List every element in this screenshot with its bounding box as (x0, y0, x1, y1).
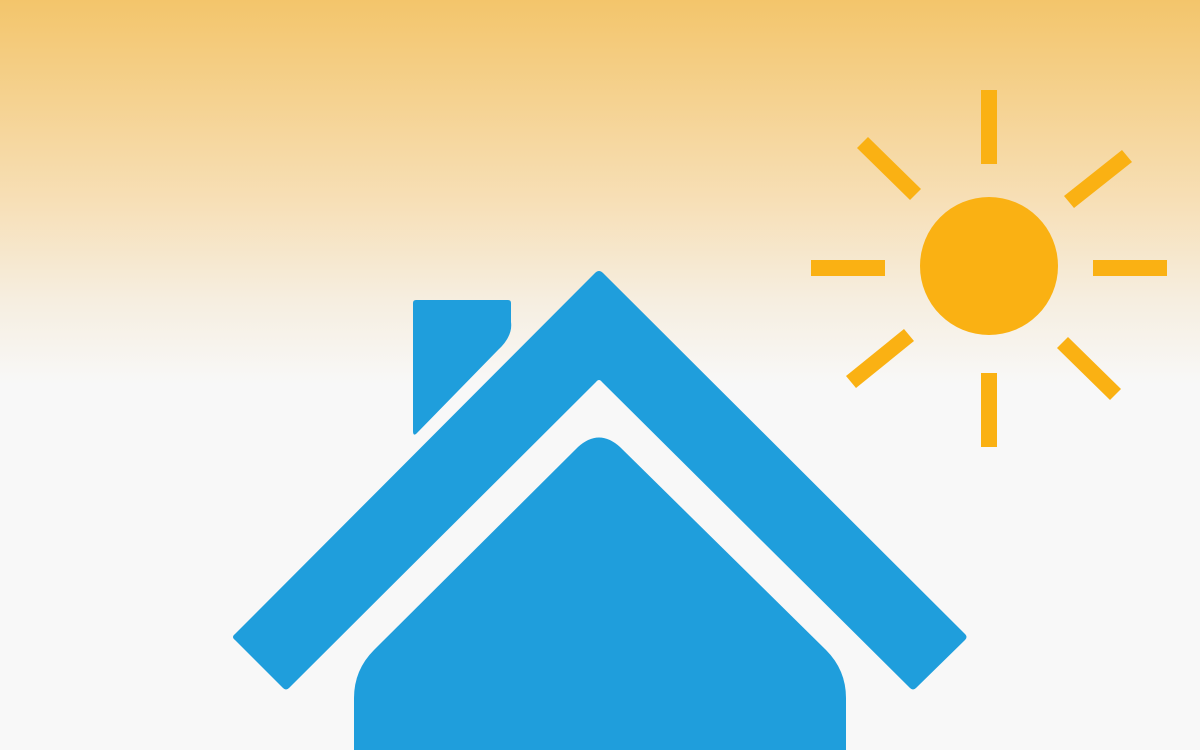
background sky gradient (0, 0, 1200, 385)
icon: house (233, 271, 966, 750)
sun rays (811, 90, 1167, 447)
sun disc (920, 197, 1058, 335)
roof (233, 271, 966, 690)
chimney (413, 300, 511, 435)
house body (354, 438, 846, 750)
icon: sun (811, 90, 1167, 447)
